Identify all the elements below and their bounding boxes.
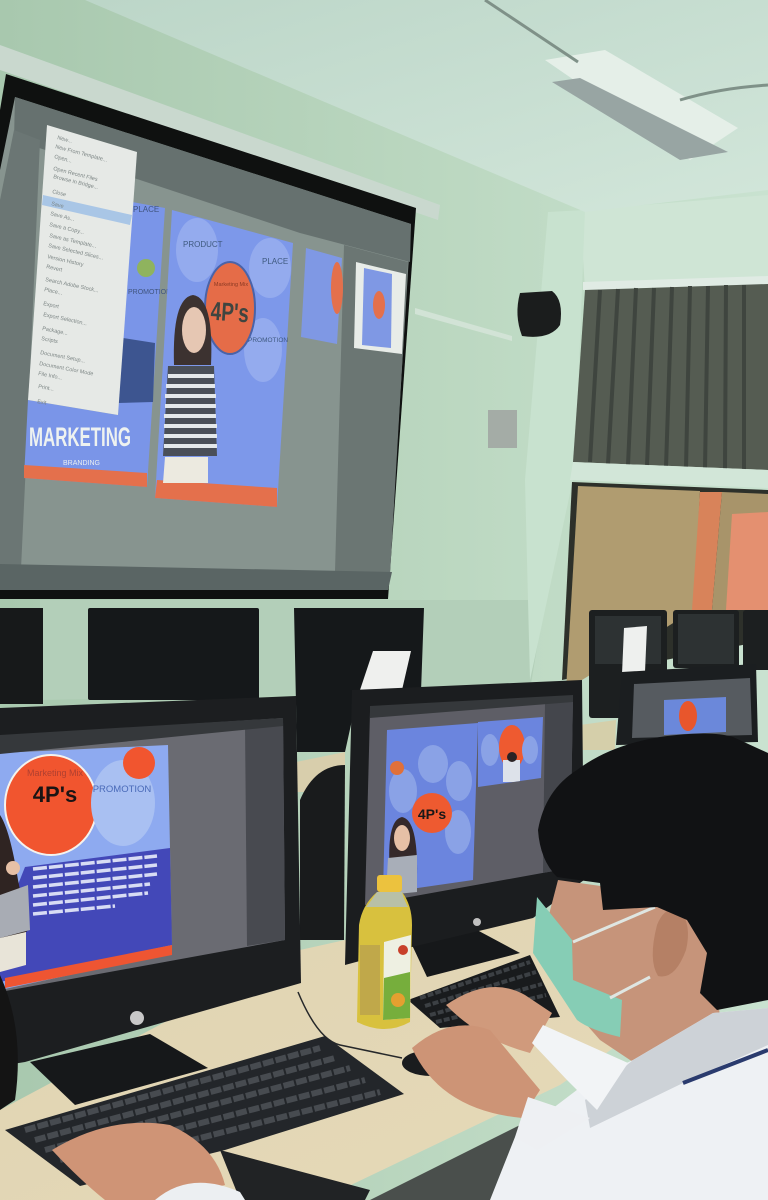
foreground dark edge bbox=[0, 975, 18, 1110]
woman bbox=[0, 815, 28, 960]
collar bbox=[585, 1008, 768, 1128]
back monitors left bbox=[0, 608, 424, 752]
file menu: Close bbox=[52, 189, 67, 198]
file menu: Print... bbox=[38, 384, 55, 393]
woman bbox=[163, 295, 217, 483]
stand bbox=[412, 930, 520, 977]
monitor center: 4P's bbox=[418, 806, 446, 822]
monitor center bbox=[345, 680, 584, 977]
monitor left bbox=[0, 696, 301, 1105]
file menu: Version History bbox=[47, 254, 84, 268]
artboard bbox=[0, 745, 172, 990]
toolbar bbox=[0, 718, 283, 754]
file menu: New From Template... bbox=[54, 144, 108, 164]
cable bbox=[298, 992, 402, 1058]
file menu: Save As... bbox=[50, 211, 75, 223]
hair bbox=[538, 734, 768, 1010]
file menu: Open... bbox=[53, 154, 73, 165]
orange 4P circle bbox=[205, 262, 255, 354]
monitor left: PROMOTION bbox=[93, 784, 151, 795]
wall box bbox=[488, 410, 517, 448]
back desk left bbox=[296, 752, 345, 792]
orange circle 4P: Marketing Mix bbox=[27, 768, 84, 778]
file menu: Save as Template... bbox=[49, 233, 97, 250]
sleeves bbox=[532, 1025, 628, 1110]
orange 4P circle: 4P's bbox=[210, 296, 250, 328]
chair bbox=[300, 765, 345, 940]
lanyard bbox=[683, 1050, 768, 1083]
file menu: Scripts bbox=[41, 336, 59, 345]
speaker bbox=[517, 291, 561, 337]
left hand bbox=[52, 1123, 370, 1200]
back monitors right bbox=[589, 610, 768, 718]
monitor stand bbox=[30, 1034, 208, 1105]
left poster: MARKETING bbox=[29, 422, 131, 452]
right panel bbox=[335, 245, 408, 575]
file menu: New... bbox=[56, 135, 73, 145]
student bbox=[412, 734, 768, 1200]
file menu bbox=[28, 125, 137, 415]
file menu: Document Color Mode bbox=[39, 361, 94, 377]
main poster: PLACE bbox=[262, 257, 288, 266]
desk bbox=[0, 918, 625, 1200]
mask bbox=[533, 897, 622, 1037]
file menu: Browse in Bridge... bbox=[53, 174, 99, 191]
mask straps bbox=[573, 907, 655, 998]
left poster: PLACE bbox=[133, 205, 159, 214]
poster text lines bbox=[33, 856, 157, 914]
file menu: Export Selection... bbox=[43, 312, 88, 327]
back desk bbox=[580, 720, 616, 750]
file menu: Export bbox=[43, 301, 60, 310]
orange circle 4P bbox=[5, 755, 97, 855]
orange circle 4P: 4P's bbox=[33, 782, 77, 807]
ear bbox=[653, 909, 688, 976]
left poster: PROMOTION bbox=[128, 289, 171, 296]
keyboard center bbox=[408, 955, 560, 1028]
window blinds bbox=[570, 276, 768, 488]
small thumbnails bbox=[301, 248, 342, 344]
file menu: Package... bbox=[42, 326, 69, 337]
panel bbox=[245, 721, 285, 946]
file menu: Save bbox=[51, 201, 64, 210]
file menu: Exit bbox=[37, 399, 47, 407]
hands bbox=[446, 987, 552, 1053]
orange 4P circle: Marketing Mix bbox=[214, 282, 248, 288]
file menu: Save a Copy... bbox=[49, 222, 85, 236]
HP logo bbox=[130, 1011, 144, 1025]
task bar bbox=[0, 564, 392, 590]
file menu: Search Adobe Stock... bbox=[45, 277, 100, 294]
main poster bbox=[155, 210, 293, 507]
screen casing bbox=[0, 45, 440, 220]
mouse bbox=[402, 1050, 460, 1076]
artboard 1 bbox=[383, 723, 478, 893]
projection screen bbox=[0, 74, 416, 599]
main poster: PRODUCT bbox=[183, 240, 223, 249]
file menu: Document Setup... bbox=[40, 350, 86, 365]
ceiling bbox=[85, 0, 768, 212]
toolbar bbox=[14, 97, 411, 262]
left poster: BRANDING bbox=[63, 460, 100, 467]
artboard 2 bbox=[478, 717, 543, 787]
file menu: Place... bbox=[44, 287, 63, 297]
file menu: Open Recent Files bbox=[53, 166, 98, 183]
neck and face bbox=[545, 880, 720, 1062]
HP logo bbox=[473, 918, 481, 926]
main poster: PROMOTION bbox=[248, 337, 288, 344]
file menu: File Info... bbox=[38, 371, 63, 382]
file menu: Revert bbox=[46, 264, 63, 274]
keyboard left bbox=[5, 1036, 404, 1186]
ceiling light bbox=[485, 0, 768, 160]
shirt bbox=[490, 1008, 768, 1200]
bottle bbox=[357, 875, 412, 1029]
door bbox=[562, 482, 768, 690]
monitor: far right with poster bbox=[616, 664, 758, 745]
left poster bbox=[24, 202, 171, 487]
desk underside bbox=[370, 1125, 530, 1200]
file menu: Save Selected Slices... bbox=[48, 243, 104, 262]
